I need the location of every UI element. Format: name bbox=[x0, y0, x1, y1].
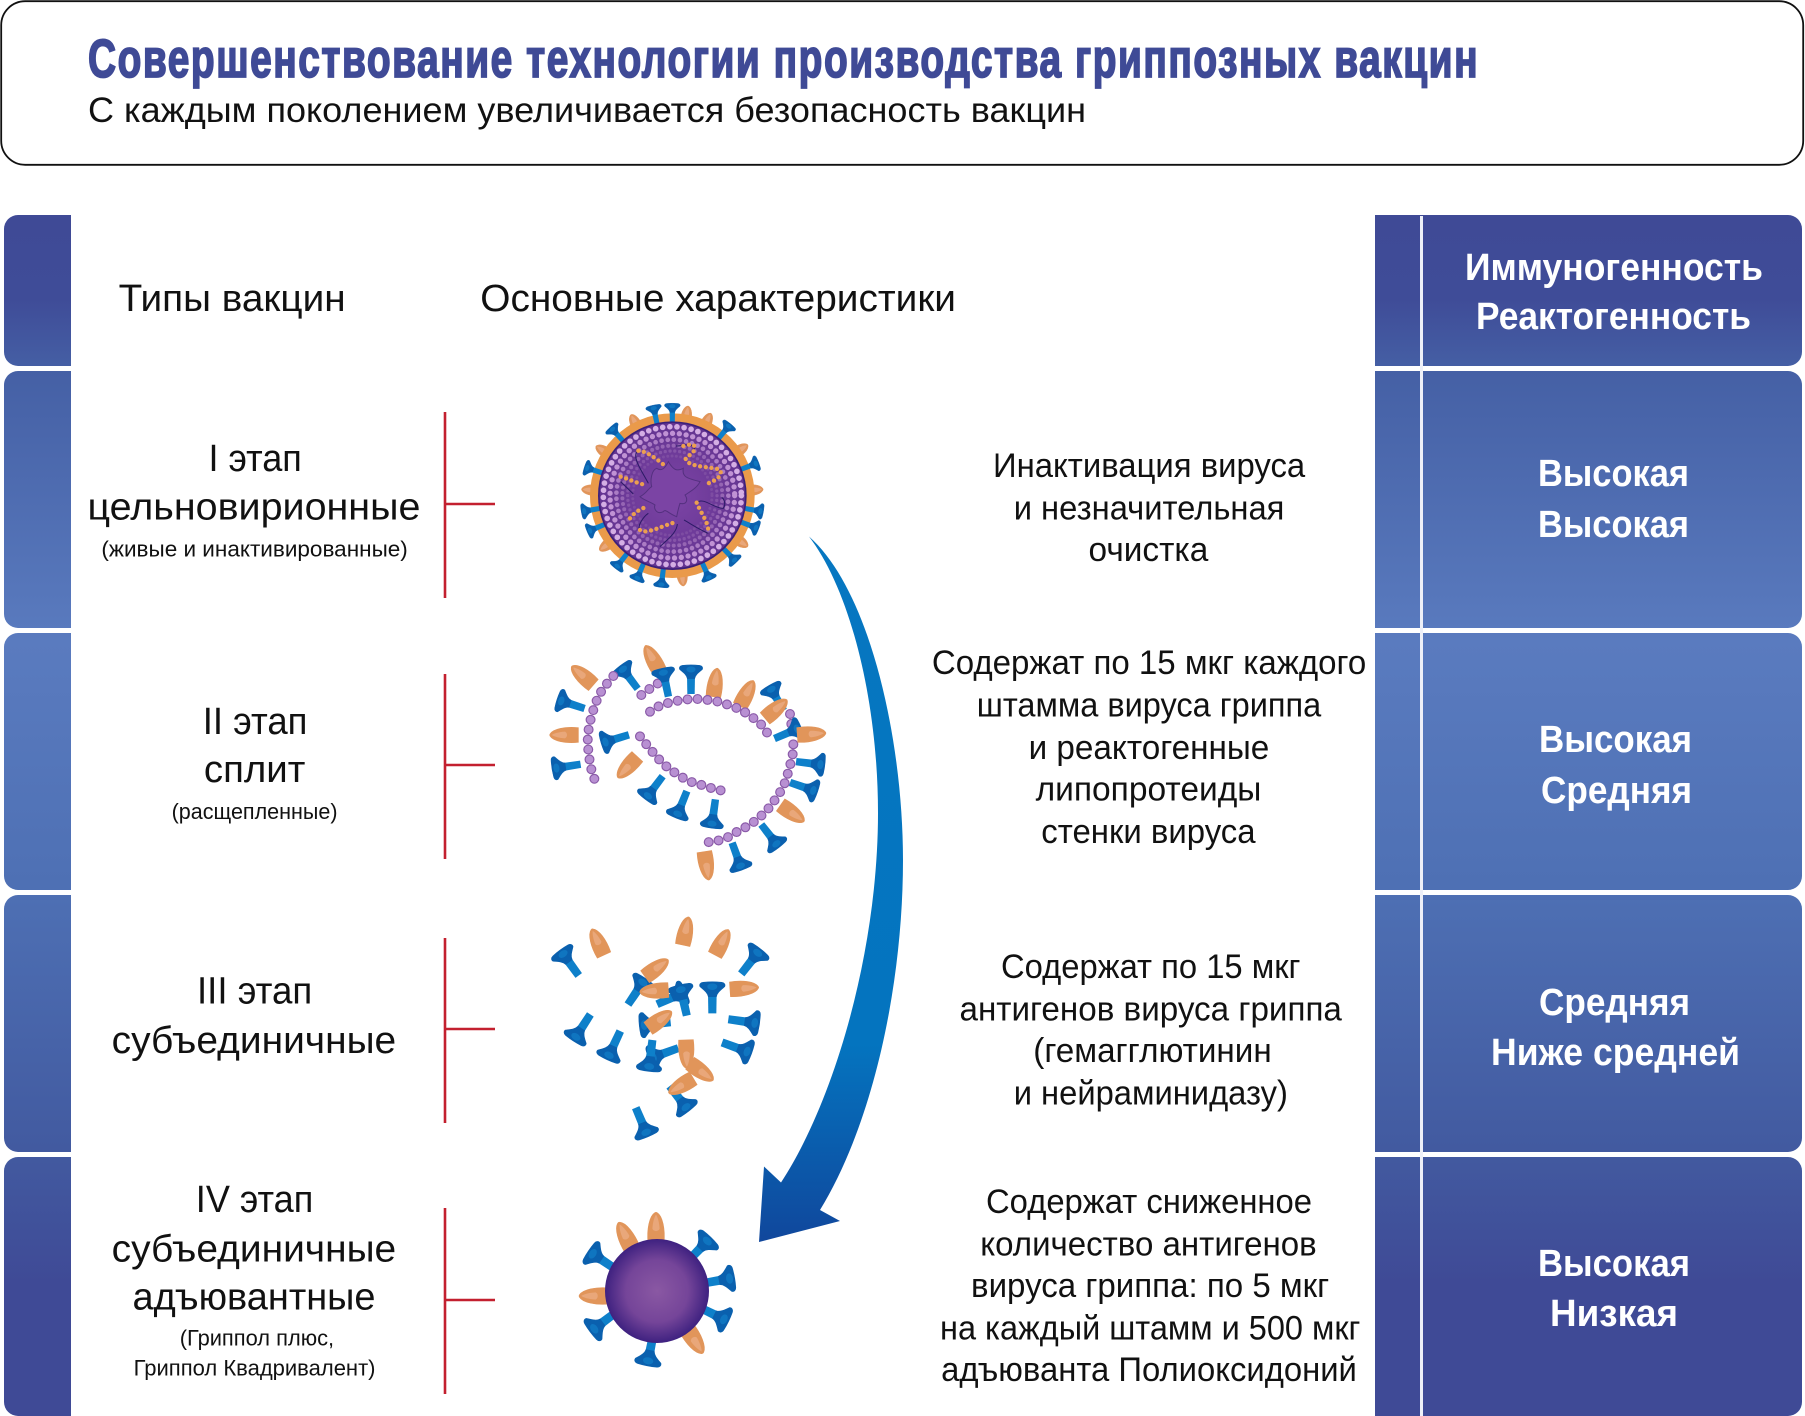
stage III label: III этап bbox=[197, 970, 312, 1012]
stage I description bbox=[993, 447, 1305, 569]
stage III label: субъединичные bbox=[112, 1020, 396, 1062]
icon: adjuvanted subunit particle bbox=[579, 1212, 737, 1368]
rating: stage IV: Высокая bbox=[1538, 1243, 1690, 1285]
stage II description: липопротеиды bbox=[1036, 771, 1261, 809]
stage II label bbox=[172, 701, 338, 824]
title box bbox=[1, 1, 1803, 165]
stage II description: стенки вируса bbox=[1041, 813, 1256, 851]
rating header: Реактогенность bbox=[1476, 296, 1751, 338]
stage III description: Содержат по 15 мкг bbox=[1001, 948, 1300, 986]
stage II description: и реактогенные bbox=[1029, 729, 1269, 767]
rating: stage III: Средняя bbox=[1539, 982, 1690, 1024]
stage I description: очистка bbox=[1088, 531, 1208, 569]
stage III label bbox=[112, 970, 396, 1062]
rating: stage II: Средняя bbox=[1541, 770, 1692, 812]
icon: whole virion bbox=[580, 403, 765, 588]
rating: stage IV bbox=[1538, 1243, 1690, 1335]
stage IV description: вируса гриппа: по 5 мкг bbox=[971, 1267, 1329, 1305]
curved arrow bbox=[759, 536, 903, 1242]
stage IV description bbox=[940, 1183, 1360, 1389]
stage II description: Содержат по 15 мкг каждого bbox=[932, 644, 1366, 682]
rating: stage I: Высокая bbox=[1538, 504, 1689, 546]
rating: stage I: Высокая bbox=[1538, 453, 1689, 495]
stage III description bbox=[960, 948, 1342, 1113]
rating header: Иммуногенность bbox=[1465, 247, 1763, 289]
stage I description: и незначительная bbox=[1014, 490, 1284, 528]
stage II label: II этап bbox=[203, 701, 308, 743]
stage IV description: на каждый штамм и 500 мкг bbox=[940, 1310, 1360, 1348]
stage II label: сплит bbox=[204, 749, 305, 791]
rating: stage II: Высокая bbox=[1539, 719, 1692, 761]
rating: stage I bbox=[1538, 453, 1689, 546]
column heading: vaccine types: Типы вакцин bbox=[119, 278, 346, 320]
stage IV description: количество антигенов bbox=[980, 1226, 1317, 1264]
rating: stage II bbox=[1539, 719, 1692, 812]
red connector brackets bbox=[445, 412, 495, 1394]
stage II description bbox=[932, 644, 1366, 851]
stage I description: Инактивация вируса bbox=[993, 447, 1305, 485]
stage IV label bbox=[112, 1179, 396, 1380]
stage IV label: IV этап bbox=[196, 1179, 313, 1221]
rating header bbox=[1465, 247, 1763, 338]
right rating column bbox=[1375, 215, 1802, 1416]
stage I label: (живые и инактивированные) bbox=[101, 536, 408, 561]
subtitle: С каждым поколением увеличивается безопасность вакцин bbox=[88, 91, 1086, 130]
stage III description: и нейраминидазу) bbox=[1014, 1075, 1288, 1113]
stage IV label: субъединичные bbox=[112, 1228, 396, 1270]
left colour strip bbox=[4, 215, 71, 1416]
icon: split virion bbox=[550, 642, 826, 881]
stage IV description: Содержат сниженное bbox=[986, 1183, 1312, 1221]
stage IV description: адъюванта Полиоксидоний bbox=[941, 1351, 1357, 1389]
rating: stage III bbox=[1491, 982, 1740, 1074]
stage III description: (гемагглютинин bbox=[1033, 1032, 1272, 1070]
rating: stage III: Ниже средней bbox=[1491, 1032, 1740, 1074]
stage II description: штамма вируса гриппа bbox=[977, 686, 1321, 724]
stage I label bbox=[88, 438, 420, 561]
column heading: main characteristics: Основные характеристики bbox=[480, 278, 956, 320]
stage IV label: Гриппол Квадривалент) bbox=[134, 1355, 376, 1380]
stage II label: (расщепленные) bbox=[172, 799, 338, 824]
stage IV label: (Гриппол плюс, bbox=[180, 1325, 334, 1350]
stage IV label: адъювантные bbox=[132, 1277, 376, 1319]
stage I label: цельновирионные bbox=[88, 486, 420, 528]
stage I label: I этап bbox=[208, 438, 302, 480]
title: Совершенствование технологии производства гриппозных вакцин bbox=[88, 28, 1478, 88]
stage III description: антигенов вируса гриппа bbox=[960, 991, 1342, 1029]
icon: subunit antigens bbox=[550, 915, 771, 1142]
rating: stage IV: Низкая bbox=[1550, 1293, 1678, 1335]
